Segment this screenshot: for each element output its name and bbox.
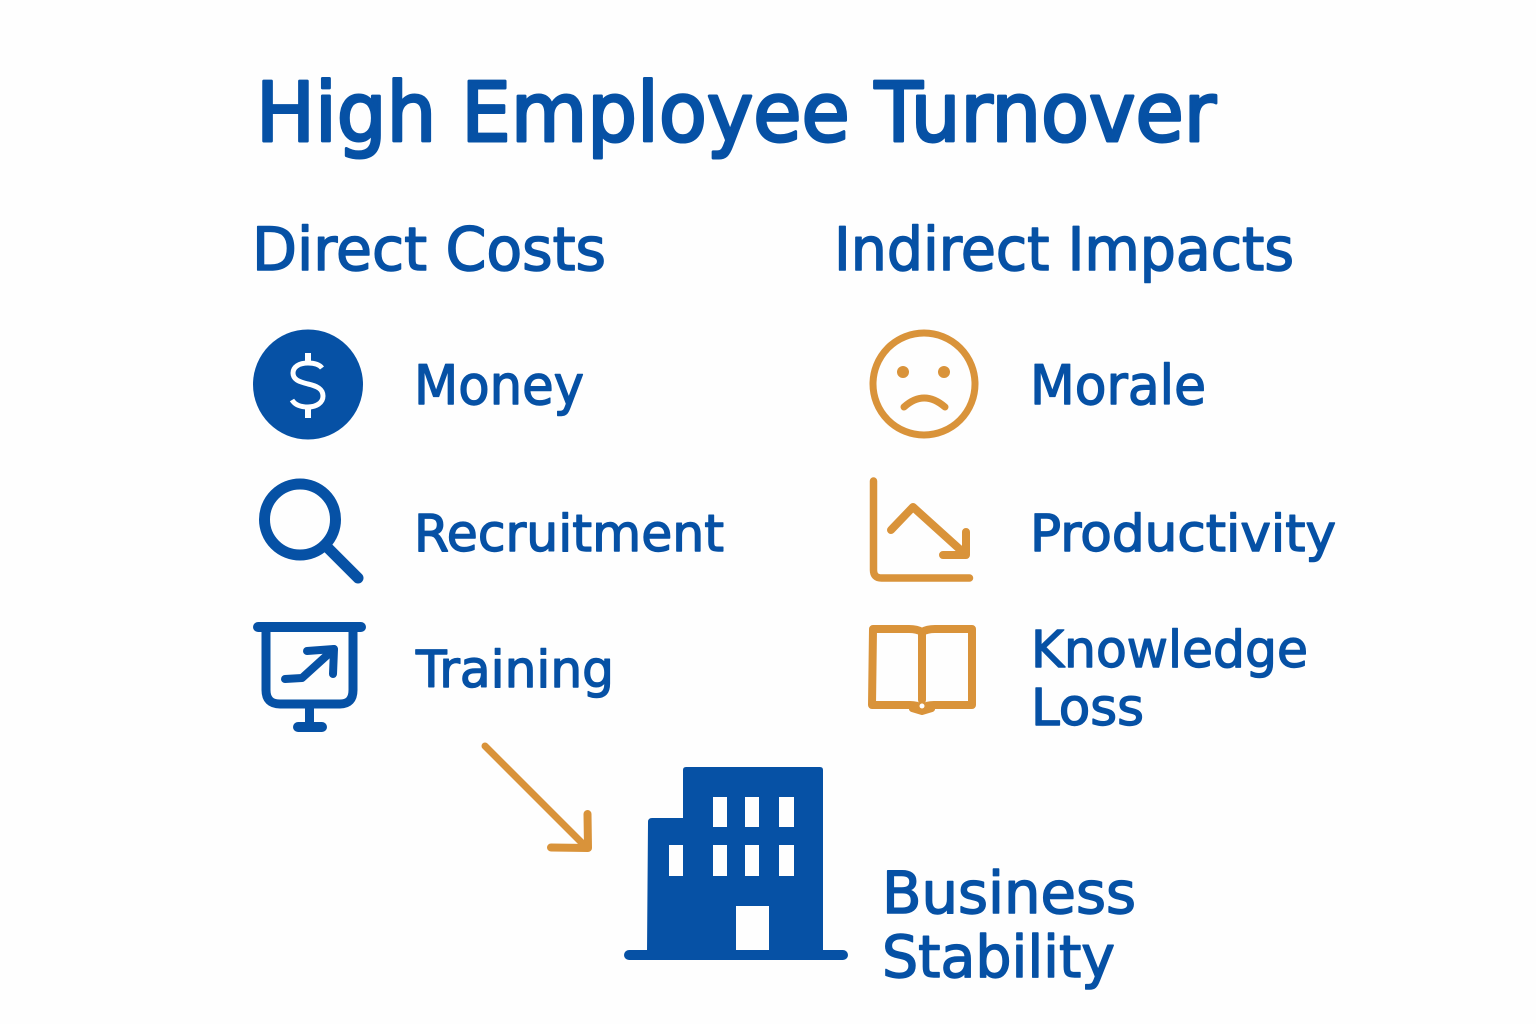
label: recruitment: Recruitment — [414, 505, 724, 564]
label: training: Training — [415, 641, 614, 700]
label: business stability: Stability — [882, 923, 1115, 991]
icon: productivity falling chart — [874, 481, 970, 578]
arrow — [485, 746, 588, 848]
label: knowledge loss: Knowledge — [1031, 621, 1308, 680]
icon: money — [253, 330, 363, 440]
icon: knowledge loss book — [872, 629, 972, 712]
label: business stability — [882, 859, 1136, 991]
heading: indirect impacts: Indirect Impacts — [834, 215, 1294, 285]
icon: morale sad face — [873, 333, 975, 435]
icon: recruitment magnifier — [264, 484, 358, 578]
label: money: Money — [414, 354, 584, 417]
label: morale: Morale — [1030, 354, 1206, 417]
icon: training presentation board — [258, 627, 361, 727]
label: business stability: Business — [882, 859, 1136, 927]
icon: building — [624, 767, 848, 960]
heading: direct costs: Direct Costs — [252, 215, 606, 285]
title: High Employee Turnover — [256, 66, 1216, 161]
label: knowledge loss — [1031, 621, 1308, 738]
label: knowledge loss: Loss — [1031, 679, 1144, 738]
label: productivity: Productivity — [1030, 505, 1336, 564]
